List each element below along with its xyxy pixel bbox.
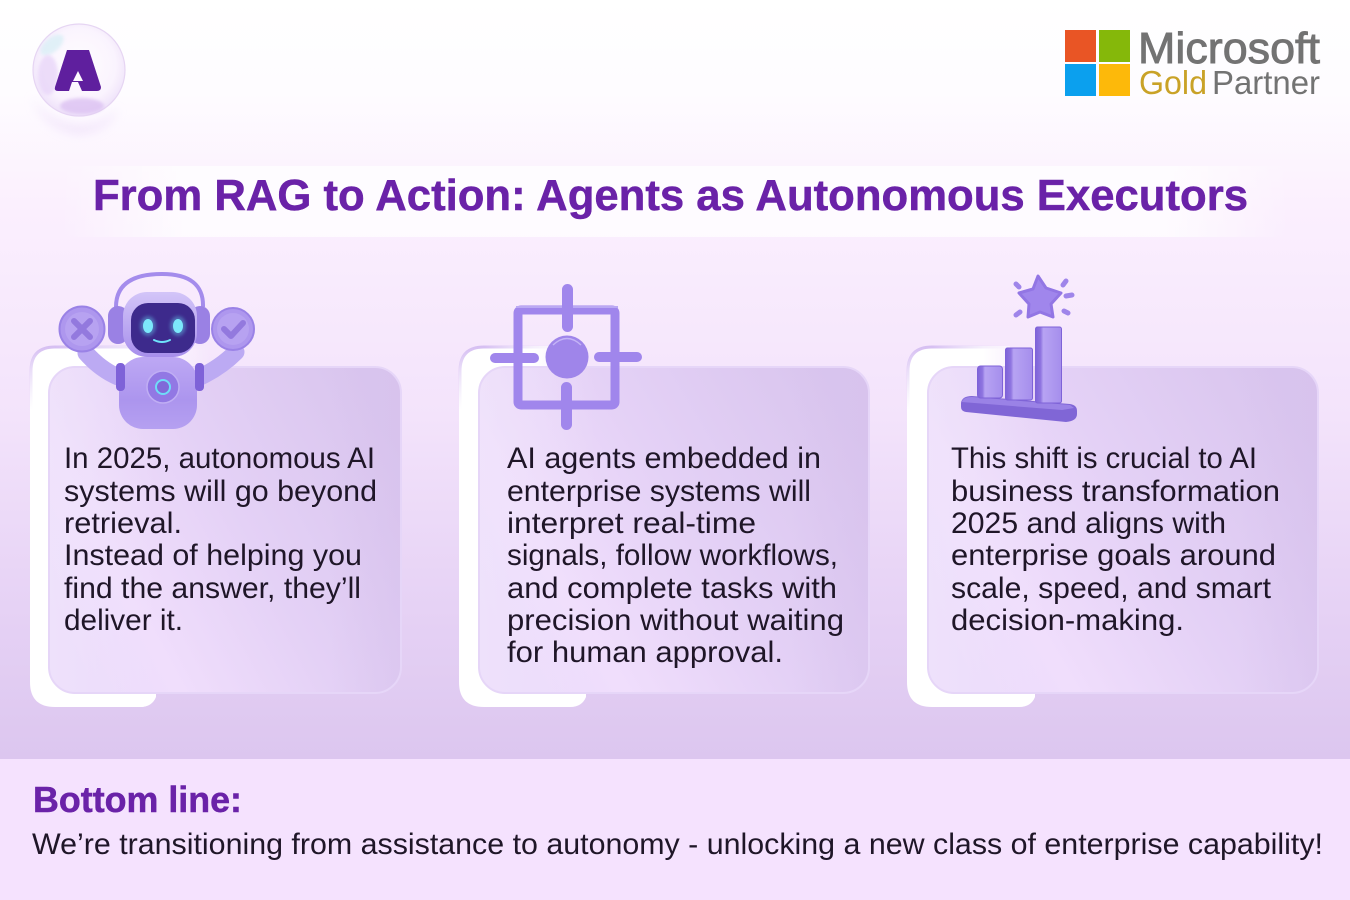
panel: embedded agents <box>459 284 869 707</box>
icon: bar chart with star <box>961 276 1077 422</box>
text block: enterprise systems will <box>507 475 811 508</box>
title: From RAG to Action: Agents as Autonomous Executors <box>93 171 1248 220</box>
text block: This shift is crucial to AI <box>951 442 1257 475</box>
text block: business transformation <box>951 475 1280 508</box>
logo: bubble with letter A <box>32 24 125 135</box>
text block: precision without waiting <box>507 604 844 637</box>
letter A <box>55 50 101 91</box>
logo: Microsoft Gold Partner: Partner <box>1212 64 1320 101</box>
text block: Instead of helping you <box>64 539 362 572</box>
text block: enterprise goals around <box>951 539 1276 572</box>
icon: robot holding cross and check <box>60 274 254 429</box>
logo: Microsoft Gold Partner <box>1065 24 1320 101</box>
text block <box>64 442 377 637</box>
logo: Microsoft Gold Partner: Gold <box>1139 64 1207 101</box>
text block: 2025 and aligns with <box>951 507 1226 540</box>
text block: interpret real-time <box>507 507 756 540</box>
bottom line text: We’re transitioning from assistance to autonomy - unlocking a new class of enterprise capability! <box>32 828 1323 861</box>
text block: find the answer, they’ll <box>64 572 361 605</box>
text block: retrieval. <box>64 507 182 540</box>
bottom line panel <box>0 759 1350 900</box>
text block <box>507 442 844 669</box>
title band <box>60 166 1290 237</box>
text block: scale, speed, and smart <box>951 572 1272 605</box>
logo: Microsoft Gold Partner: Microsoft <box>1138 24 1320 73</box>
bottom line heading: Bottom line: <box>33 779 242 820</box>
panel: autonomous systems <box>30 274 401 707</box>
text block: deliver it. <box>64 604 183 637</box>
text block: decision-making. <box>951 604 1184 637</box>
text block: systems will go beyond <box>64 475 377 508</box>
text block: signals, follow workflows, <box>507 539 838 572</box>
text block: for human approval. <box>507 636 783 669</box>
icon: target crosshair <box>490 284 642 430</box>
text block: AI agents embedded in <box>507 442 821 475</box>
text block <box>951 442 1280 637</box>
text block: and complete tasks with <box>507 572 837 605</box>
text block: In 2025, autonomous AI <box>64 442 375 475</box>
panel: business transformation <box>907 276 1318 707</box>
